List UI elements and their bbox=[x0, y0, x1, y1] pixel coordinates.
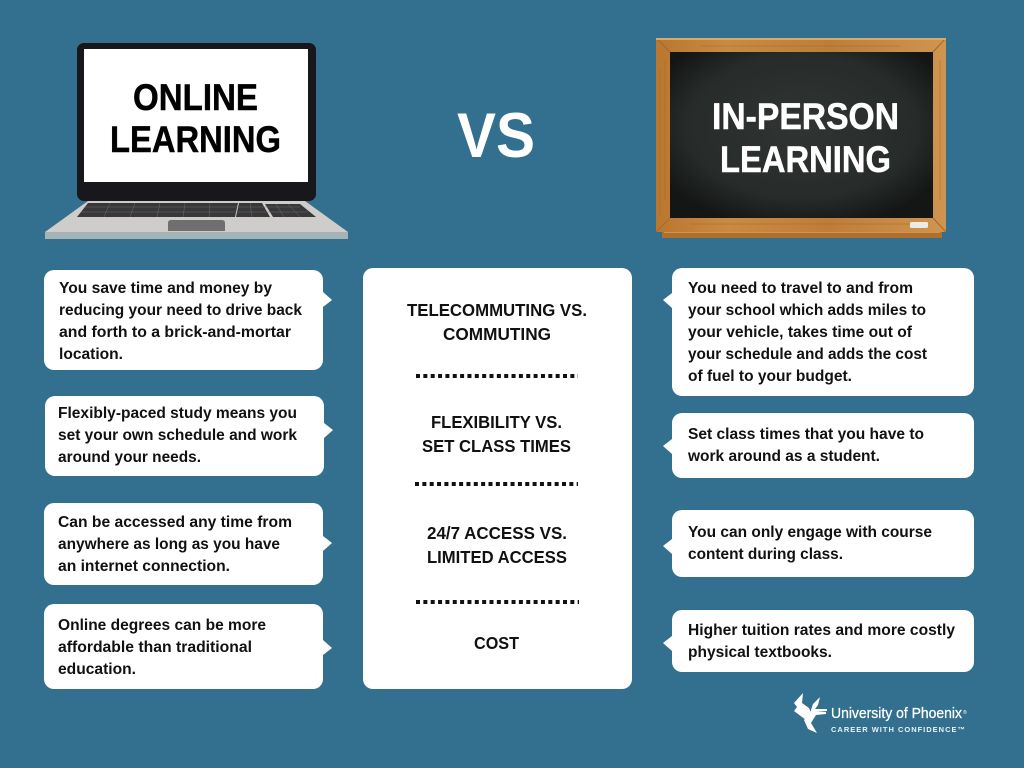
callout: online commuting bbox=[44, 270, 332, 370]
callout: in-person commuting: of fuel to your budget. bbox=[688, 368, 852, 385]
laptop bezel bbox=[77, 43, 316, 201]
callout: online commuting: reducing your need to drive back bbox=[59, 302, 302, 319]
heading: VS: VS bbox=[457, 101, 535, 171]
chalkboard tray bbox=[662, 226, 942, 238]
title: in-person learning: LEARNING bbox=[720, 139, 891, 180]
laptop keyboard bbox=[77, 203, 316, 217]
panel: online learning points bbox=[44, 270, 333, 689]
icon: laptop with online learning title bbox=[45, 43, 348, 239]
callout: online access: an internet connection. bbox=[58, 558, 230, 575]
callout: in-person class times bbox=[663, 413, 974, 478]
category: flexibility vs set class times bbox=[422, 412, 571, 456]
title: in-person learning bbox=[712, 96, 899, 180]
callout: online cost: education. bbox=[58, 661, 136, 678]
callout: in-person access: content during class. bbox=[688, 546, 843, 563]
panel: comparison categories bbox=[363, 268, 632, 689]
category: flexibility vs set class times: FLEXIBILITY VS. bbox=[431, 412, 562, 432]
laptop base bbox=[45, 201, 348, 239]
logo: University of Phoenix: University of Phoenix bbox=[831, 706, 963, 722]
logo: University of Phoenix bbox=[794, 693, 967, 734]
category: flexibility vs set class times: SET CLASS TIMES bbox=[422, 436, 571, 456]
icon: chalkboard with in-person learning title bbox=[656, 38, 946, 238]
category: 24/7 access vs limited access bbox=[427, 523, 567, 567]
callout: online cost: affordable than traditional bbox=[58, 639, 252, 656]
callout: online access: anywhere as long as you have bbox=[58, 536, 280, 553]
callout: online access bbox=[44, 503, 332, 585]
callout: online commuting: You save time and money by bbox=[59, 280, 272, 297]
chalkboard frame bbox=[656, 38, 946, 232]
callout: online flexibility: Flexibly-paced study means you bbox=[58, 405, 297, 422]
category: telecommuting vs commuting: TELECOMMUTING VS. bbox=[407, 300, 587, 320]
title: online learning: ONLINE bbox=[133, 77, 258, 118]
panel: in-person learning points bbox=[663, 268, 974, 672]
callout: online flexibility: set your own schedule and work bbox=[58, 427, 297, 444]
category: 24/7 access vs limited access: LIMITED ACCESS bbox=[427, 547, 567, 567]
category: telecommuting vs commuting bbox=[407, 300, 587, 344]
title: online learning: LEARNING bbox=[110, 119, 281, 160]
callout: in-person class times: Set class times that you have to bbox=[688, 426, 924, 443]
callout: online access: Can be accessed any time from bbox=[58, 514, 292, 531]
callout: online cost: Online degrees can be more bbox=[58, 617, 266, 634]
laptop screen bbox=[84, 49, 308, 182]
chalk bbox=[910, 222, 928, 228]
icon: phoenix bbox=[794, 693, 827, 733]
chalkboard slate bbox=[670, 52, 933, 218]
callout: in-person cost: Higher tuition rates and more costly bbox=[688, 622, 955, 639]
laptop trackpad bbox=[168, 220, 225, 231]
callout: in-person commuting: your vehicle, takes time out of bbox=[688, 324, 913, 341]
callout: online flexibility bbox=[45, 396, 333, 476]
callout: in-person commuting: You need to travel to and from bbox=[688, 280, 913, 297]
callout: in-person class times: work around as a student. bbox=[687, 448, 880, 465]
title: online learning bbox=[110, 77, 281, 160]
callout: in-person cost bbox=[663, 610, 974, 672]
category: 24/7 access vs limited access: 24/7 ACCESS VS. bbox=[427, 523, 567, 543]
callout: online cost bbox=[44, 604, 332, 689]
logo: University of Phoenix: CAREER WITH CONFIDENCE™ bbox=[831, 725, 965, 734]
category: cost: COST bbox=[474, 633, 519, 653]
category: telecommuting vs commuting: COMMUTING bbox=[443, 324, 551, 344]
callout: in-person cost: physical textbooks. bbox=[688, 644, 832, 661]
callout: online commuting: location. bbox=[59, 346, 123, 363]
callout: in-person commuting: your schedule and adds the cost bbox=[688, 346, 928, 363]
callout: in-person commuting: your school which adds miles to bbox=[688, 302, 926, 319]
callout: online commuting: and forth to a brick-and-mortar bbox=[59, 324, 291, 341]
logo: University of Phoenix: ® bbox=[963, 709, 967, 716]
callout: in-person access: You can only engage with course bbox=[688, 524, 932, 541]
title: in-person learning: IN-PERSON bbox=[712, 96, 899, 137]
callout: in-person commuting bbox=[663, 268, 974, 396]
callout: online flexibility: around your needs. bbox=[58, 449, 201, 466]
callout: in-person access bbox=[663, 510, 974, 577]
